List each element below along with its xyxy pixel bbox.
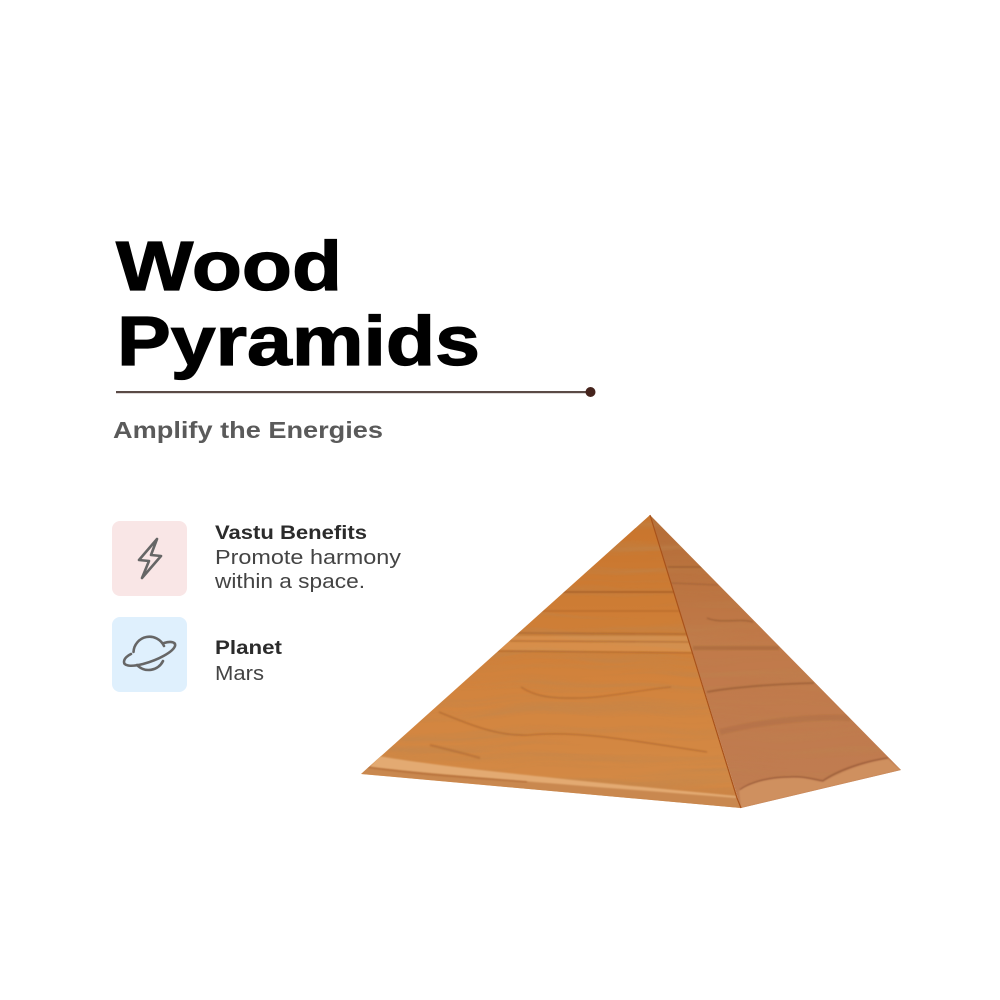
planet text: Planet bbox=[215, 638, 283, 659]
base bevel bbox=[361, 757, 741, 808]
right base bevel bbox=[739, 759, 901, 808]
panel: planet bbox=[112, 617, 283, 692]
vastu benefits text: within a space. bbox=[214, 571, 365, 593]
pyramid ridge bbox=[650, 515, 741, 808]
vastu benefits text: Promote harmony bbox=[215, 547, 401, 569]
wood pyramid bbox=[355, 510, 905, 812]
icon: planet bbox=[112, 617, 187, 692]
icon: lightning bolt bbox=[112, 521, 187, 596]
pyramid right face bbox=[645, 510, 905, 812]
title: Pyramids bbox=[117, 302, 480, 380]
title: Wood bbox=[116, 227, 342, 305]
pyramid left face bbox=[355, 510, 745, 812]
planet text: Mars bbox=[215, 663, 264, 685]
vastu benefits text bbox=[214, 523, 401, 593]
planet text bbox=[215, 638, 283, 685]
divider line with dot bbox=[116, 387, 596, 397]
panel: vastu benefits bbox=[112, 521, 401, 596]
title bbox=[116, 227, 480, 380]
vastu benefits text: Vastu Benefits bbox=[215, 523, 367, 544]
light band bbox=[495, 636, 702, 652]
subtitle: Amplify the Energies bbox=[113, 417, 383, 443]
